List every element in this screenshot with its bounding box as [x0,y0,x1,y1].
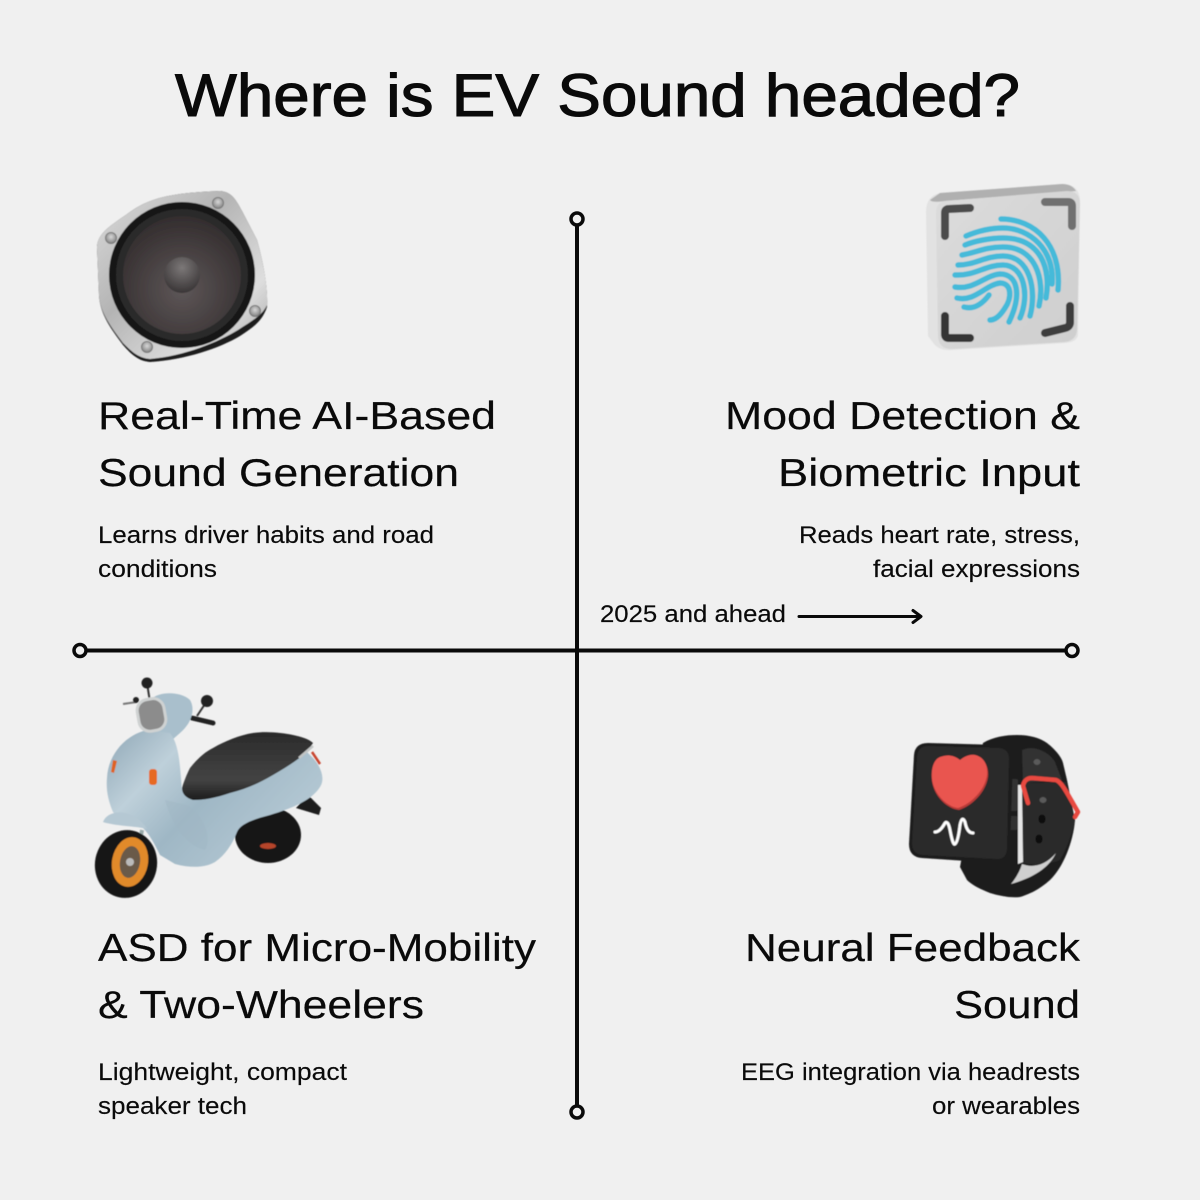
vertical axis [571,213,583,1118]
heading: ASD for Micro-Mobility [98,927,537,970]
heading [98,395,496,495]
panel: micro-mobility [89,678,537,1120]
icon: speaker [97,191,267,362]
description: conditions [98,556,217,583]
description [741,1059,1080,1120]
heading: Biometric Input [778,452,1080,495]
heading: Mood Detection & [725,395,1080,438]
description: Learns driver habits and road [98,522,434,549]
heading: Real-Time AI-Based [98,395,496,438]
icon: fingerprint tile [926,184,1080,350]
panel: mood detection [725,184,1080,583]
heading [98,927,537,1027]
description [799,522,1080,583]
heading: Neural Feedback [745,927,1081,970]
description: Reads heart rate, stress, [799,522,1080,549]
heading: & Two-Wheelers [98,984,424,1027]
panel: real-time AI sound [97,191,496,583]
icon: smartwatch [909,735,1078,897]
description [98,522,434,583]
heading: Sound [954,984,1080,1027]
heading: Sound Generation [98,452,459,495]
timeline label: 2025 and ahead [600,601,786,628]
panel: neural feedback [741,735,1081,1120]
heading [745,927,1081,1027]
heading [725,395,1080,495]
horizontal axis [74,644,1078,656]
description: facial expressions [873,556,1080,583]
icon: scooter [89,678,322,904]
description: Lightweight, compact [98,1059,347,1086]
description: EEG integration via headrests [741,1059,1080,1086]
description: or wearables [932,1093,1080,1120]
title: Where is EV Sound headed? [175,62,1020,129]
description [98,1059,347,1120]
description: speaker tech [98,1093,247,1120]
arrow [799,610,921,622]
